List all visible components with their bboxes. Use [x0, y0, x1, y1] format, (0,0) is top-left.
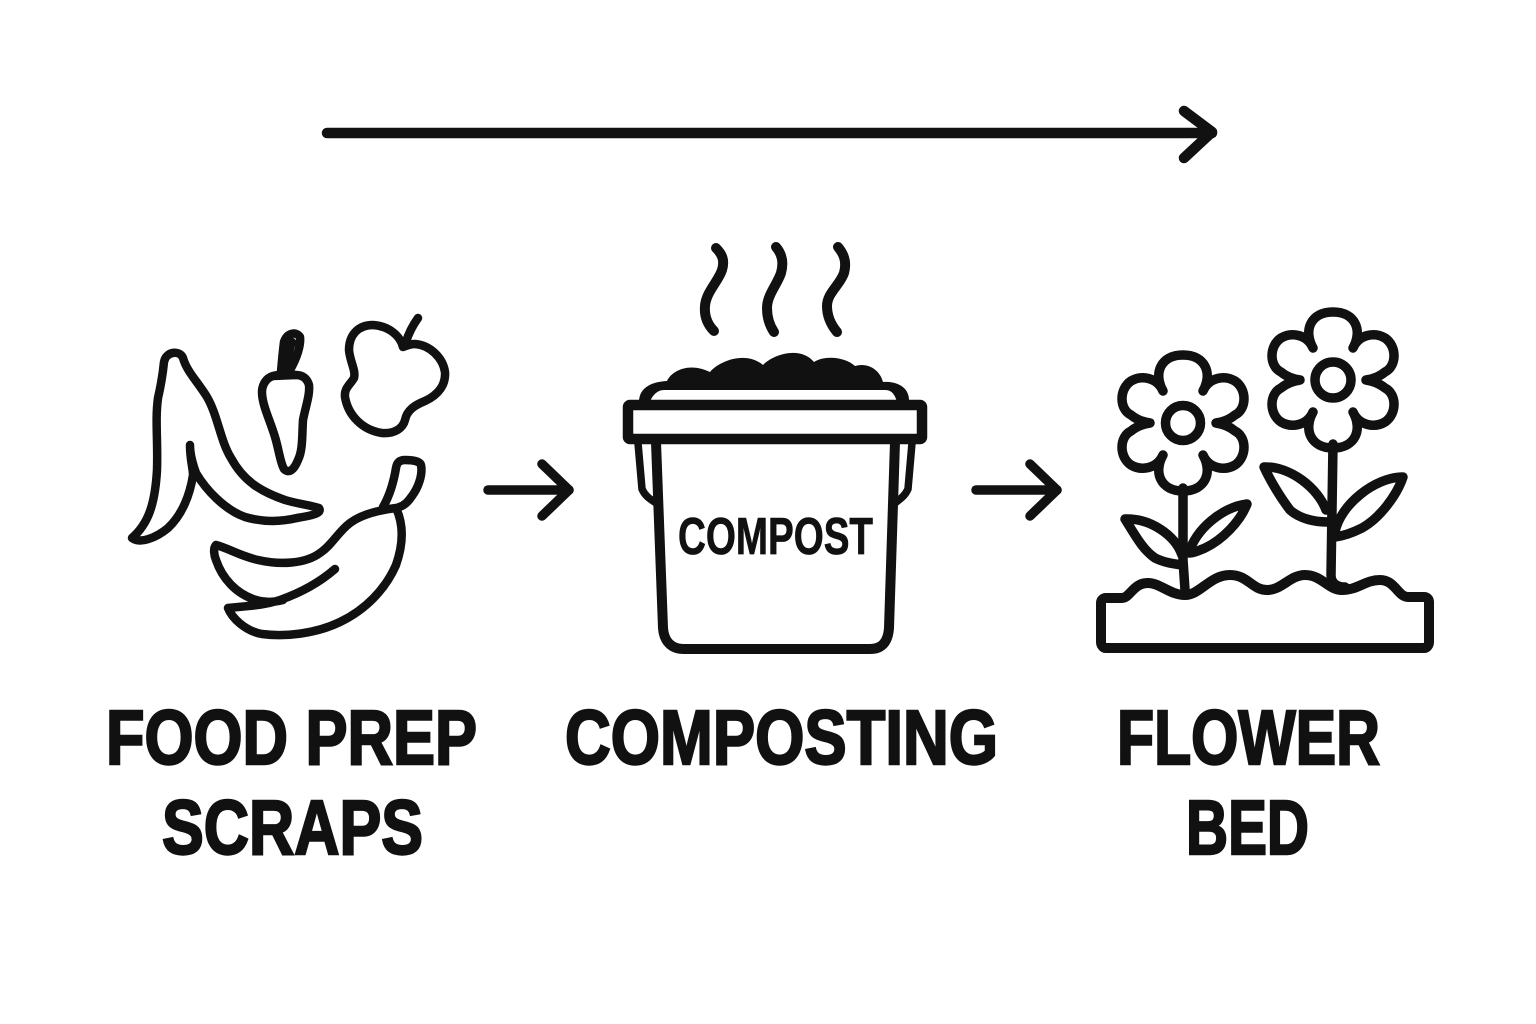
label: flower bed: BED	[1186, 785, 1309, 871]
icon: banana	[214, 460, 421, 635]
label: food prep scraps: SCRAPS	[162, 785, 423, 871]
arrow: overall process direction	[327, 111, 1212, 158]
icon: left flower	[1122, 355, 1247, 590]
soil bed	[1101, 575, 1429, 648]
icon: compost bucket	[628, 247, 922, 649]
compost soil heap	[639, 353, 909, 402]
icon: apple core	[345, 318, 445, 433]
icon: chili pepper	[262, 334, 309, 471]
label: flower bed	[1117, 695, 1380, 871]
arrow: composting to flower bed	[976, 464, 1057, 516]
label: food prep scraps: FOOD PREP	[106, 695, 477, 781]
arrow: scraps to composting	[488, 464, 569, 516]
icon: steam	[705, 247, 845, 332]
icon: banana peel	[132, 353, 320, 540]
bucket rim	[628, 405, 922, 439]
icon: right flower	[1264, 312, 1403, 587]
icon: flower bed	[1101, 312, 1429, 648]
icon: food prep scraps	[132, 318, 445, 635]
label: composting: COMPOSTING	[565, 695, 998, 781]
label: flower bed: FLOWER	[1117, 695, 1380, 781]
bucket handles	[638, 443, 912, 503]
bucket body	[656, 442, 895, 649]
bucket label: COMPOST	[678, 508, 873, 566]
label: food prep scraps	[106, 695, 477, 871]
